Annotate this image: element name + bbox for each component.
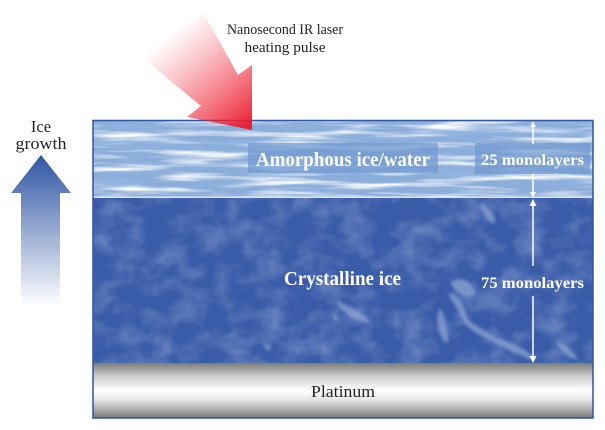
arrow: 25 monolayers bottom	[530, 174, 536, 198]
label: crystalline ice: Crystalline ice	[284, 269, 401, 290]
label: ice growth: Ice	[31, 117, 51, 136]
label: laser pulse: Nanosecond IR laser	[227, 22, 343, 38]
monolayers label background	[475, 143, 590, 174]
label: ice growth: growth	[16, 134, 67, 153]
panel: platinum layer	[93, 363, 593, 418]
panel: amorphous ice/water layer	[93, 121, 593, 198]
panel: crystalline ice layer	[93, 198, 593, 363]
crystal patches	[262, 203, 578, 360]
label: laser pulse: heating pulse	[244, 40, 326, 56]
arrow: 75 monolayers bottom	[530, 296, 536, 363]
label: amorphous ice/water: Amorphous ice/water	[256, 150, 430, 171]
arrow: laser heating pulse	[143, 12, 252, 130]
label: platinum: Platinum	[311, 382, 375, 401]
amorphous label background	[248, 143, 438, 173]
frame	[93, 120, 593, 418]
arrow: ice growth	[11, 155, 71, 306]
label: 75 monolayers: 75 monolayers	[481, 275, 584, 292]
arrow: 25 monolayers top	[530, 122, 536, 144]
arrow: 75 monolayers top	[530, 199, 536, 266]
label: 25 monolayers: 25 monolayers	[481, 152, 584, 169]
